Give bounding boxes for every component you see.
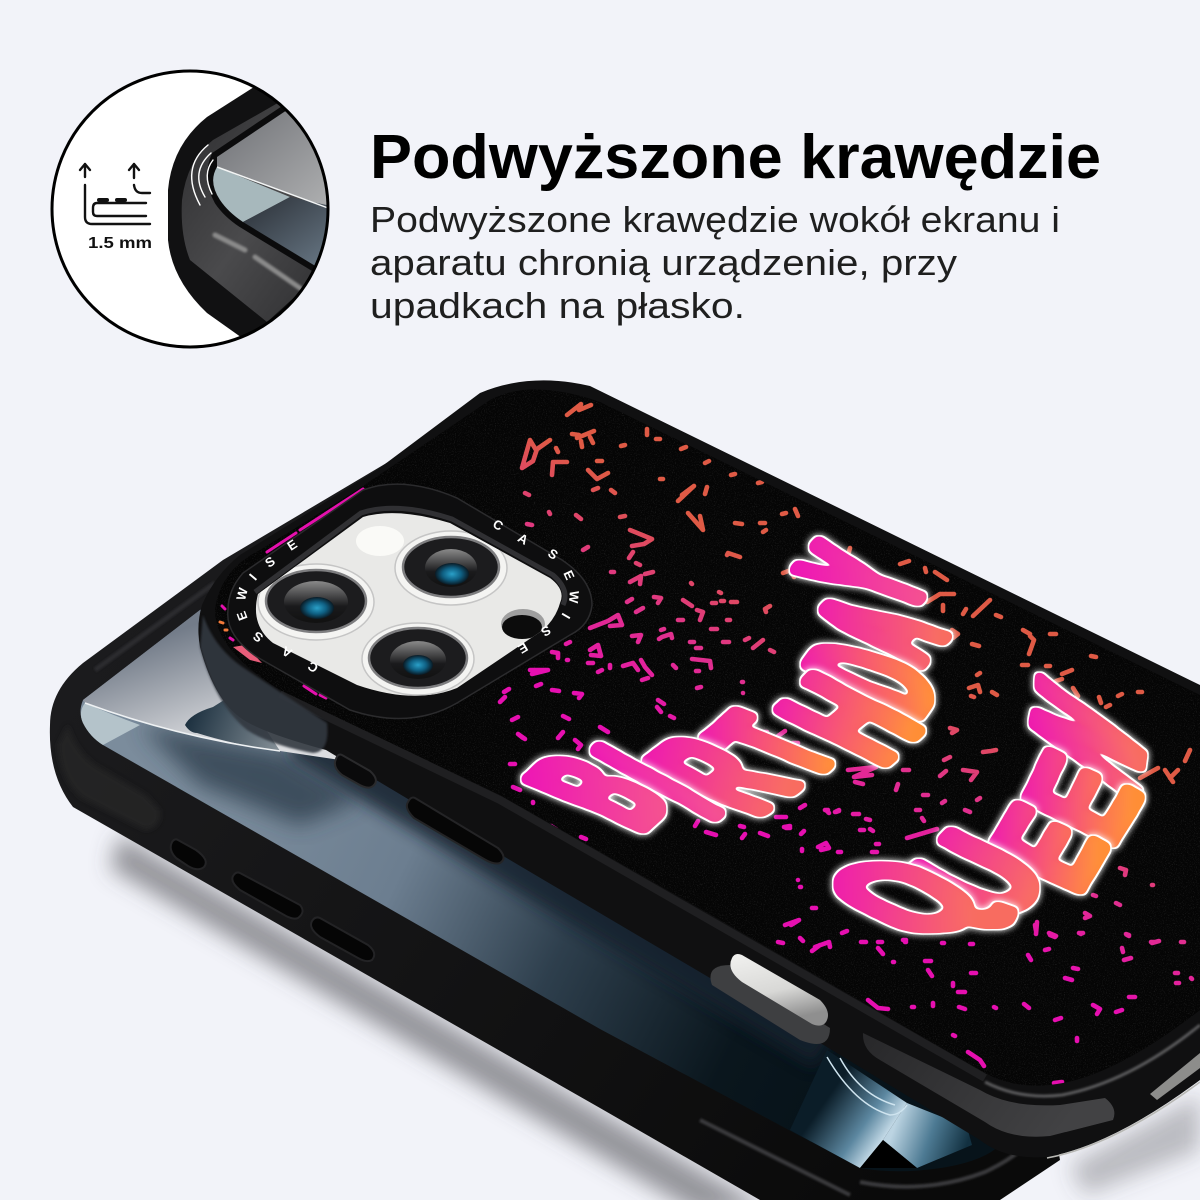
magnified phone corner <box>168 80 340 340</box>
microphone hole <box>501 609 545 639</box>
upper phone case <box>198 380 1200 1158</box>
printed panel with speckle <box>200 370 1200 1100</box>
orange fleck <box>220 622 227 630</box>
screen dark notch <box>185 690 280 751</box>
thin wallpaper arcs <box>827 1057 907 1115</box>
black wedge on wallpaper <box>860 1140 917 1168</box>
letter I: I <box>246 571 260 583</box>
volume down button <box>311 917 374 961</box>
arrow right <box>129 164 139 178</box>
letter A: A <box>515 530 531 548</box>
case body <box>198 380 1200 1157</box>
letter C: C <box>305 658 321 676</box>
blue pupil <box>403 655 433 675</box>
black print surface <box>200 370 1200 1100</box>
letter C: C <box>490 516 506 534</box>
case profile <box>85 185 150 224</box>
blue pupil <box>300 597 334 619</box>
lower right wallpaper glow right panel <box>883 1103 972 1168</box>
letter D: D <box>766 616 978 738</box>
rim highlight <box>985 1025 1200 1096</box>
lower phone bottom rim highlight <box>700 1120 1020 1195</box>
bottom silver edge <box>1047 1082 1200 1158</box>
letter W: W <box>566 590 582 604</box>
side button <box>407 798 504 864</box>
lens window glass <box>256 513 562 696</box>
translucent grip at bottom corner <box>863 1033 1114 1137</box>
silver button <box>730 954 828 1026</box>
glass upper area <box>217 100 340 208</box>
panel: raised edge detail circle <box>52 71 340 347</box>
letter A: A <box>279 643 295 661</box>
power button <box>171 839 206 869</box>
letter R: R <box>605 715 836 833</box>
letter E: E <box>515 639 531 657</box>
line 2: aparatu chronią urządzenie, przy <box>370 242 957 283</box>
lens inner cone <box>284 581 348 623</box>
lower phone case <box>50 455 1060 1200</box>
surface grain <box>200 370 1200 1100</box>
dark area near the top of the wallpaper <box>140 725 360 825</box>
letter S: S <box>545 545 561 563</box>
letter S: S <box>262 553 278 571</box>
circle background <box>52 71 328 347</box>
letter H: H <box>737 652 961 787</box>
speckles <box>500 404 1192 1083</box>
letter N: N <box>998 647 1176 830</box>
rim highlight <box>95 583 215 670</box>
letter S: S <box>538 622 554 640</box>
screen shading <box>140 725 827 1047</box>
lens barrel <box>369 628 467 688</box>
letter B: B <box>484 732 711 850</box>
lens barrel <box>266 570 366 632</box>
device profile <box>93 203 146 216</box>
lens inner cone <box>425 549 477 587</box>
translucent grip near camera <box>200 615 327 753</box>
phone artwork lettering: BIRTHDAY <box>484 527 986 850</box>
blue pupil <box>435 563 469 585</box>
letter W: W <box>233 585 251 602</box>
button recess <box>710 965 830 1044</box>
letter S: S <box>250 628 266 646</box>
letter T: T <box>667 695 881 798</box>
rim highlights <box>215 235 300 288</box>
speckles beside camera ring <box>222 489 363 698</box>
flash <box>356 526 404 556</box>
silver surround <box>258 564 374 640</box>
letter Q: Q <box>784 838 1027 957</box>
camera ring inner bevel <box>255 508 565 605</box>
black lip around glass <box>213 110 340 280</box>
window contents <box>258 526 545 695</box>
device bumps <box>99 198 125 202</box>
letter A: A <box>774 572 986 686</box>
lens bottom <box>362 623 474 695</box>
title: Podwyższone krawędzie <box>370 123 1101 192</box>
screen pale wedge <box>81 703 140 745</box>
lens top right <box>395 531 507 605</box>
side rim lighter band <box>280 694 985 1078</box>
line 1: Podwyższone krawędzie wokół ekranu i <box>370 199 1060 240</box>
lens left <box>258 564 374 640</box>
microphone hole dark <box>502 615 542 639</box>
letter E: E <box>284 536 300 554</box>
body text <box>370 199 1060 326</box>
circle outline <box>52 71 328 347</box>
letter I: I <box>551 723 766 841</box>
camera ring <box>228 484 592 719</box>
glass pale blue area <box>213 167 290 222</box>
phone artwork lettering: QUEEN <box>784 647 1176 957</box>
label: 1.5 mm: 1.5 mm <box>88 235 152 252</box>
white divider line <box>217 167 328 208</box>
letter U: U <box>873 812 1085 941</box>
shadow cast by the upper phone <box>300 735 827 1047</box>
CASEWISE ring lettering <box>233 516 582 676</box>
translucent rim band <box>182 100 340 322</box>
line 3: upadkach na płasko. <box>370 285 745 326</box>
letter E: E <box>233 609 251 623</box>
mute switch hole <box>335 754 376 788</box>
lip hook <box>134 185 150 193</box>
screen <box>80 560 1010 1171</box>
icon: raised edge diagram <box>80 164 150 224</box>
speaker grille <box>1150 1053 1200 1100</box>
arrow left <box>80 164 90 177</box>
glass dark blue area <box>243 197 340 267</box>
case body <box>168 80 340 340</box>
letter E: E <box>993 729 1170 867</box>
translucent corner grip <box>58 725 160 830</box>
letter E: E <box>959 784 1140 913</box>
silver surround <box>395 531 507 605</box>
letter I: I <box>559 611 573 621</box>
coral patch beside camera ring <box>233 645 262 663</box>
white curve on screen <box>85 703 280 751</box>
letter E: E <box>560 568 578 582</box>
volume up button <box>232 872 303 919</box>
lower right wallpaper glow left panel <box>790 1050 907 1168</box>
white shock arcs <box>192 145 213 205</box>
lens inner cone <box>390 641 446 679</box>
drop shadows under the phones <box>110 835 1200 1200</box>
silver surround <box>362 623 474 695</box>
screen upper grey wallpaper <box>83 610 340 760</box>
lens barrel <box>403 537 499 597</box>
camera island <box>228 484 592 719</box>
letter Y: Y <box>757 527 969 629</box>
case body <box>50 455 1060 1200</box>
